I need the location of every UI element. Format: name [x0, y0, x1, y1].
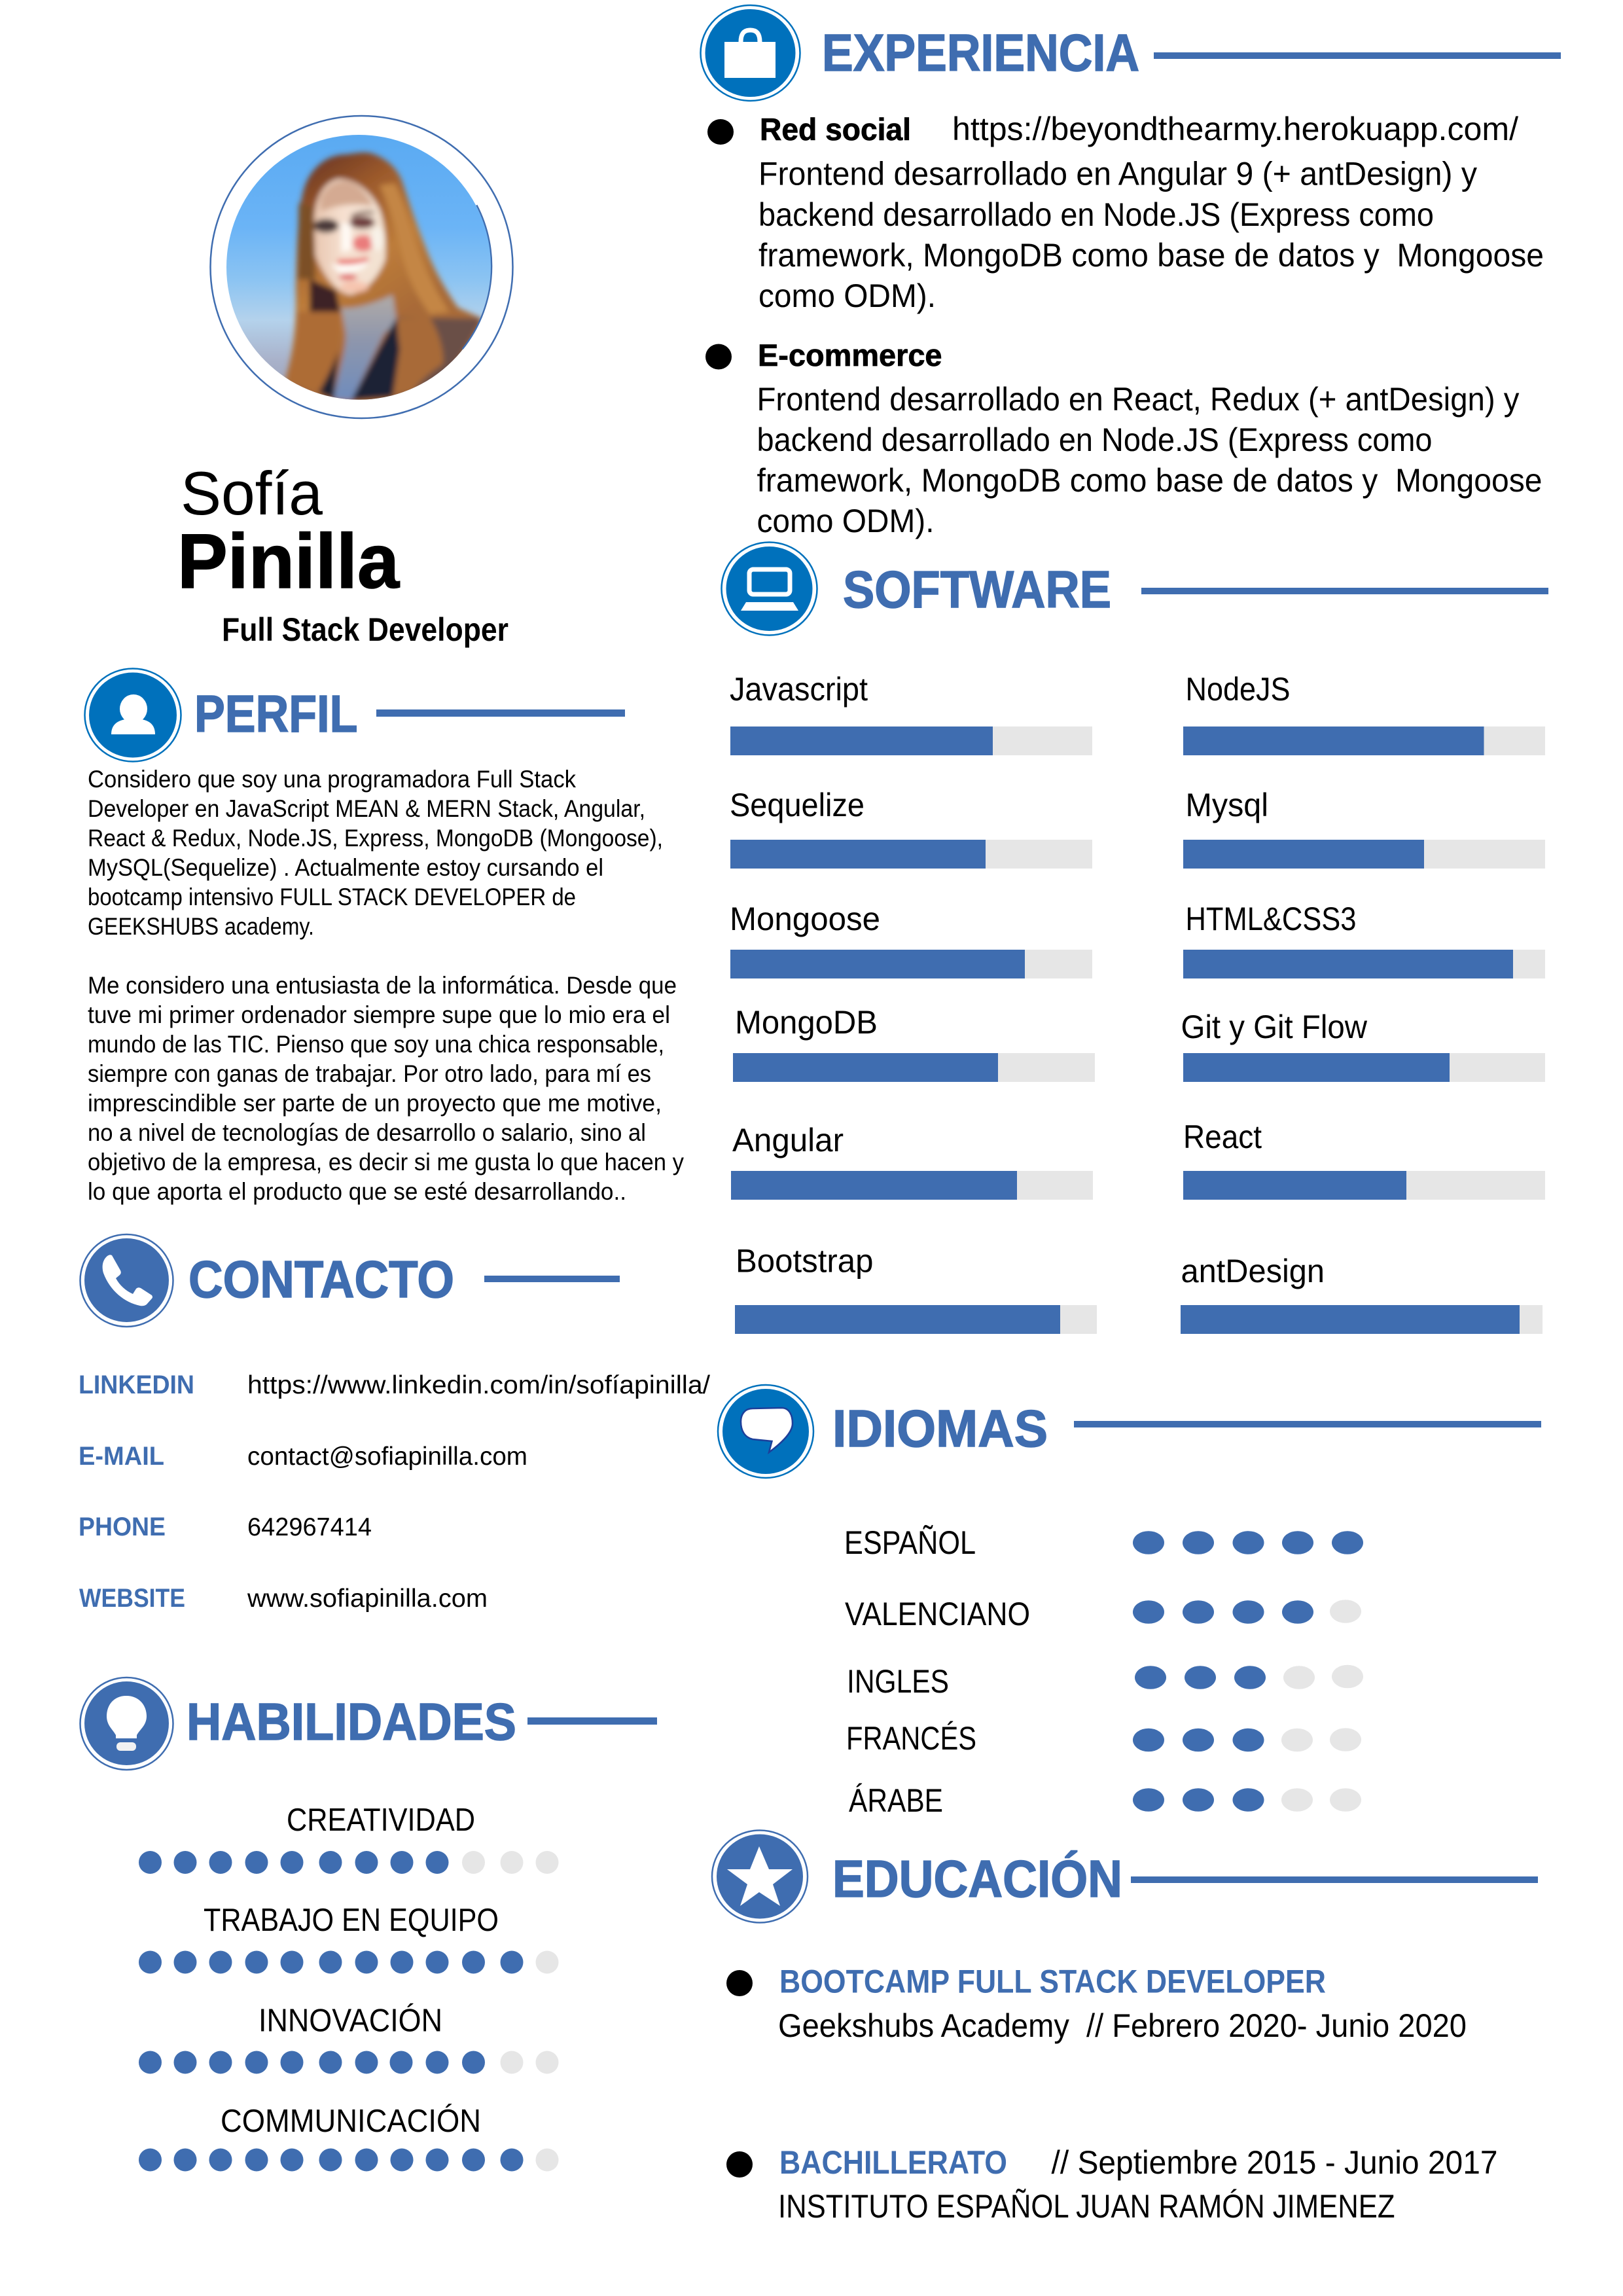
skill bar: html css: [1183, 901, 1545, 978]
skill bar: git: [1181, 1009, 1545, 1082]
skill bar: mysql: [1183, 787, 1545, 869]
skill bar: sequelize: Sequelize: [730, 787, 865, 823]
contact row: phone: PHONE: [79, 1513, 166, 1541]
skill bar: antdesign: antDesign: [1181, 1253, 1325, 1289]
experience item: e-commerce: [705, 338, 1542, 539]
experience item: red social: backend desarrollado en Node.JS (Express como: [758, 196, 1434, 233]
language: ingles: INGLES: [847, 1663, 949, 1700]
experience item: e-commerce: E-commerce: [758, 338, 942, 372]
icon: light bulb: [80, 1677, 173, 1770]
section: habilidades: [80, 1677, 657, 2172]
experience item: e-commerce: framework, MongoDB como base de datos y Mongoose: [757, 462, 1542, 499]
profile paragraph 1: [88, 766, 663, 940]
section: experiencia: [700, 5, 1561, 539]
contact row: email: E-MAIL: [79, 1442, 164, 1471]
icon: laptop: [721, 542, 817, 635]
skill: trabajo en equipo: TRABAJO EN EQUIPO: [204, 1903, 499, 1938]
skill bar: git: Git y Git Flow: [1181, 1009, 1368, 1045]
skill bar: mysql: Mysql: [1186, 787, 1268, 823]
contact row: email: contact@sofiapinilla.com: [247, 1443, 527, 1471]
skill bar: react: [1183, 1119, 1545, 1200]
profile paragraph 2: mundo de las TIC. Pienso que soy una chica responsable,: [88, 1031, 664, 1058]
section: educacion: [712, 1830, 1538, 2225]
skill bar: javascript: Javascript: [730, 671, 868, 708]
heading: PERFIL: [194, 685, 357, 743]
section: idiomas: [718, 1385, 1541, 1819]
skill: trabajo en equipo: [139, 1903, 559, 1974]
name: last name: Pinilla: [177, 518, 400, 605]
profile paragraph 2: tuve mi primer ordenador siempre supe que lo mio era el: [88, 1001, 670, 1028]
skill: communicacion: [139, 2104, 559, 2172]
profile paragraph 2: objetivo de la empresa, es decir si me gusta lo que hacen y: [88, 1149, 684, 1175]
heading: HABILIDADES: [187, 1693, 516, 1751]
language: valenciano: [845, 1596, 1361, 1632]
skill bar: sequelize: [730, 787, 1092, 869]
education item: bachillerato: [726, 2144, 1497, 2225]
skill bar: angular: Angular: [732, 1122, 844, 1158]
profile paragraph 1: GEEKSHUBS academy.: [88, 913, 314, 940]
language: valenciano: VALENCIANO: [845, 1596, 1030, 1632]
experience item: e-commerce: backend desarrollado en Node.JS (Express como: [757, 422, 1432, 458]
contact row: website: www.sofiapinilla.com: [247, 1585, 488, 1613]
profile paragraph 1: MySQL(Sequelize) . Actualmente estoy cursando el: [88, 854, 603, 881]
heading: IDIOMAS: [832, 1399, 1048, 1458]
profile paragraph 2: imprescindible ser parte de un proyecto que me motive,: [88, 1090, 662, 1117]
skill bar: mongoose: [730, 901, 1092, 978]
profile paragraph 2: Me considero una entusiasta de la informática. Desde que: [88, 972, 677, 999]
skill bar: angular: [731, 1122, 1093, 1200]
education item: bootcamp: Geekshubs Academy // Febrero 2020- Junio 2020: [778, 2007, 1467, 2044]
language: arabe: ÁRABE: [849, 1782, 943, 1819]
heading: EXPERIENCIA: [822, 24, 1139, 82]
skill bar: bootstrap: Bootstrap: [736, 1242, 873, 1279]
skill bar: javascript: [730, 671, 1092, 755]
icon: phone: [80, 1234, 173, 1327]
contact row: linkedin: [79, 1371, 710, 1399]
contact row: email: [79, 1442, 527, 1471]
profile paragraph 1: React & Redux, Node.JS, Express, MongoDB (Mongoose),: [88, 825, 663, 852]
language: frances: [846, 1720, 1361, 1757]
skill: creatividad: CREATIVIDAD: [287, 1803, 475, 1838]
contact row: website: WEBSITE: [79, 1584, 185, 1613]
skill bar: react: React: [1183, 1119, 1262, 1155]
profile paragraph 2: siempre con ganas de trabajar. Por otro lado, para mí es: [88, 1060, 651, 1087]
language: espanol: ESPAÑOL: [844, 1524, 976, 1561]
name: first name: Sofía: [181, 459, 323, 528]
skill bar: mongoose: Mongoose: [730, 901, 880, 937]
experience item: red social: Frontend desarrollado en Angular 9 (+ antDesign) y: [758, 156, 1477, 192]
contact row: phone: 642967414: [247, 1513, 372, 1541]
icon: shopping bag: [700, 5, 800, 101]
profile photo: [211, 116, 513, 418]
contact row: website: [79, 1584, 488, 1613]
education item: bootcamp: BOOTCAMP FULL STACK DEVELOPER: [779, 1964, 1326, 2000]
experience item: e-commerce: como ODM).: [757, 503, 935, 539]
profile paragraph 2: [88, 972, 684, 1205]
heading: SOFTWARE: [843, 560, 1111, 619]
language: ingles: [847, 1663, 1363, 1700]
skill: creatividad: [139, 1803, 559, 1874]
experience item: red social: [707, 111, 1544, 314]
section: perfil: [85, 669, 684, 1205]
profile paragraph 1: Developer en JavaScript MEAN & MERN Stack, Angular,: [88, 795, 645, 822]
experience item: e-commerce: Frontend desarrollado en React, Redux (+ antDesign) y: [757, 381, 1520, 418]
language: frances: FRANCÉS: [846, 1720, 976, 1757]
profile paragraph 2: lo que aporta el producto que se esté desarrollando..: [88, 1178, 626, 1205]
education item: bachillerato: BACHILLERATO: [779, 2144, 1007, 2181]
icon: star: [712, 1830, 808, 1923]
skill bar: mongodb: MongoDB: [735, 1004, 878, 1041]
skill: innovacion: [139, 2003, 559, 2073]
profile paragraph 1: Considero que soy una programadora Full Stack: [88, 766, 576, 793]
experience item: red social: https://beyondthearmy.herokuapp.com/: [952, 111, 1518, 147]
section: contacto: [79, 1234, 710, 1613]
contact row: linkedin: LINKEDIN: [79, 1371, 194, 1399]
skill: innovacion: INNOVACIÓN: [259, 2003, 442, 2038]
skill bar: nodejs: NodeJS: [1186, 671, 1291, 708]
contact row: linkedin: https://www.linkedin.com/in/sofíapinilla/: [247, 1371, 710, 1399]
profile paragraph 2: no a nivel de tecnologías de desarrollo o salario, sino al: [88, 1119, 646, 1146]
education item: bootcamp: [726, 1964, 1467, 2044]
heading: EDUCACIÓN: [832, 1850, 1122, 1908]
language: arabe: [849, 1782, 1361, 1819]
heading: CONTACTO: [188, 1250, 454, 1308]
contact row: phone: [79, 1513, 372, 1541]
experience item: red social: como ODM).: [758, 278, 936, 314]
profile paragraph 1: bootcamp intensivo FULL STACK DEVELOPER de: [88, 884, 576, 910]
icon: speech bubble: [718, 1385, 813, 1478]
education item: bachillerato: // Septiembre 2015 - Junio 2017: [1051, 2144, 1497, 2181]
experience item: red social: Red social: [760, 112, 911, 147]
language: espanol: [844, 1524, 1363, 1561]
skill bar: html css: HTML&CSS3: [1186, 901, 1356, 937]
skill bar: mongodb: [733, 1004, 1095, 1082]
section: software: [721, 542, 1548, 1334]
skill bar: bootstrap: [735, 1242, 1097, 1334]
education item: bachillerato: INSTITUTO ESPAÑOL JUAN RAMÓN JIMENEZ: [778, 2188, 1395, 2225]
skill: communicacion: COMMUNICACIÓN: [221, 2104, 481, 2139]
icon: person: [85, 669, 181, 762]
skill bar: nodejs: [1183, 671, 1545, 755]
job title: Full Stack Developer: [222, 611, 508, 648]
skill bar: antdesign: [1181, 1253, 1543, 1334]
experience item: red social: framework, MongoDB como base de datos y Mongoose: [758, 237, 1544, 274]
